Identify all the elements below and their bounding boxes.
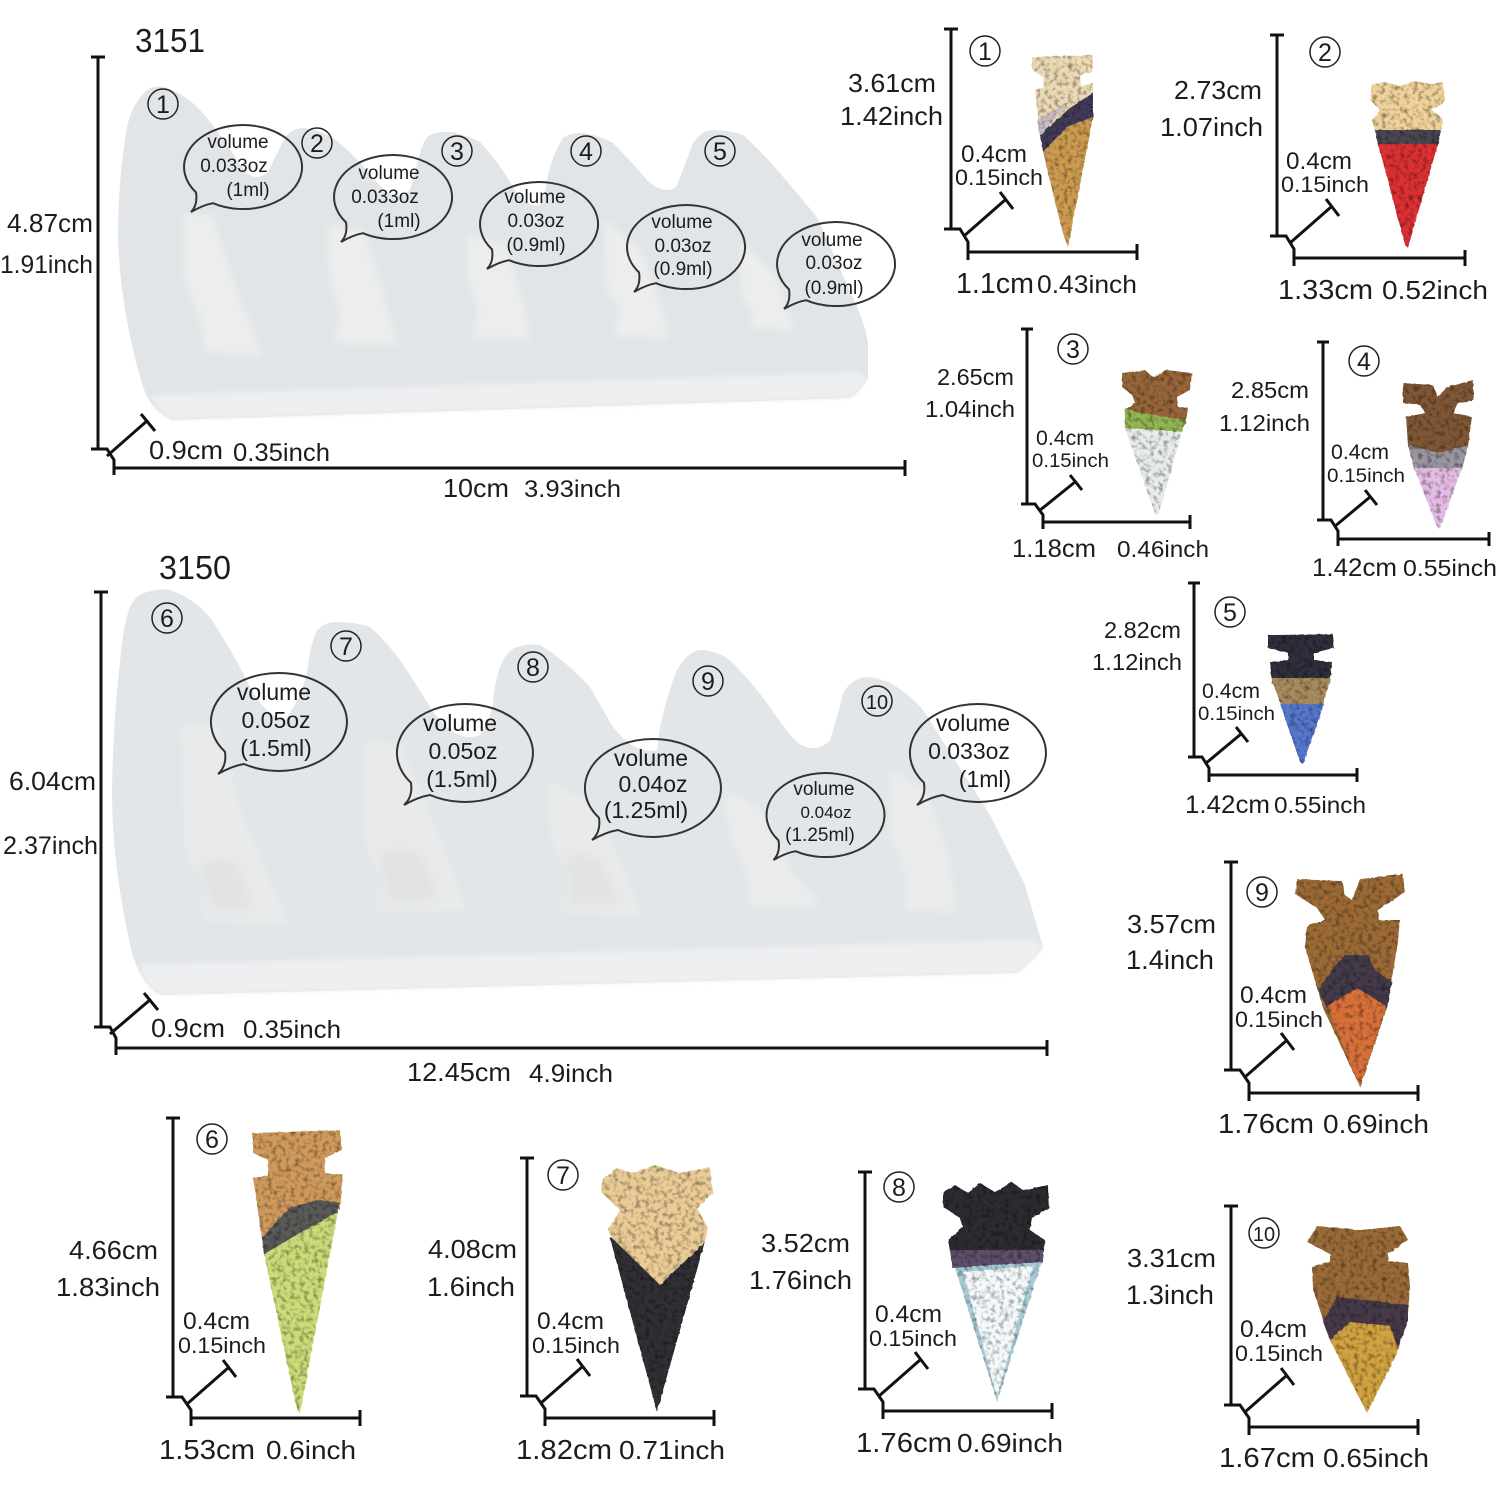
dimension labels: 0.15inch: [1235, 1007, 1323, 1032]
dimension labels: 2.65cm: [937, 364, 1014, 390]
number badges: 2: [310, 130, 324, 158]
callout: volume 7: volume: [423, 710, 497, 736]
number badges: 8: [526, 654, 540, 682]
dimension labels: 4.66cm: [69, 1235, 158, 1265]
dimension labels: 0.15inch: [1198, 704, 1275, 725]
number badge: 5: [1223, 599, 1237, 627]
callout: volume 1: 0.033oz: [200, 156, 268, 177]
dimension labels: 0.15inch: [1235, 1341, 1323, 1366]
number badge: 10: [1253, 1224, 1275, 1246]
callout: volume 5: (0.9ml): [804, 278, 864, 299]
dimension labels: 0.4cm: [961, 141, 1027, 168]
callout: volume 5: volume: [801, 230, 863, 251]
dimension lines: [1224, 1206, 1418, 1435]
callout: volume 4: volume: [651, 212, 713, 233]
dimension labels: 0.15inch: [955, 165, 1043, 190]
arrowhead 7: [602, 1165, 713, 1412]
number badges: 10: [866, 692, 888, 714]
dimension labels: 0.4cm: [183, 1308, 250, 1335]
callout: volume 3: (0.9ml): [506, 235, 566, 256]
dimension labels: 2.85cm: [1231, 377, 1309, 403]
number badge: 7: [556, 1162, 570, 1190]
dimension labels: [1126, 909, 1429, 1139]
dimension labels: 0.35inch: [243, 1016, 341, 1044]
dimension labels: 1.42cm: [1312, 554, 1397, 582]
panel: arrowhead 3: [925, 329, 1209, 563]
dimension labels: 1.33cm: [1278, 274, 1373, 305]
dimension labels: 1.76cm: [856, 1427, 952, 1458]
callout: volume 9: [767, 773, 885, 860]
dimension labels: 1.42cm: [1185, 791, 1270, 819]
callout: volume 2: volume: [358, 163, 420, 184]
number badges: 3: [450, 138, 464, 166]
dimension labels: 0.35inch: [233, 439, 330, 467]
number badges: [152, 603, 892, 716]
callout: volume 4: 0.03oz: [654, 236, 712, 257]
callout: volume 6: (1.5ml): [240, 735, 312, 761]
number badge: [548, 1160, 578, 1190]
dimension labels: 0.6inch: [266, 1435, 356, 1465]
dimension labels: 0.46inch: [1117, 536, 1209, 562]
dimension labels: 1.83inch: [56, 1272, 160, 1302]
dimension labels: 2.82cm: [1104, 617, 1181, 643]
dimension labels: 0.55inch: [1403, 555, 1497, 581]
dimension labels: 0.69inch: [1323, 1109, 1429, 1139]
dimension labels: 2.37inch: [3, 832, 98, 860]
dimension labels: 1.76inch: [749, 1265, 852, 1295]
dimension labels: 1.4inch: [1126, 945, 1214, 975]
dimension lines: [91, 57, 905, 476]
panel: arrowhead 2: [1160, 35, 1488, 305]
arrowhead 6: [252, 1130, 343, 1413]
dimension lines: [520, 1158, 714, 1426]
dimension labels: 0.9cm: [149, 435, 223, 465]
dimension labels: [0, 208, 621, 503]
dimension labels: 0.69inch: [957, 1428, 1063, 1458]
dimension labels: [1160, 75, 1488, 305]
dimension labels: 0.43inch: [1037, 271, 1137, 299]
dimension labels: 0.55inch: [1274, 792, 1366, 818]
dimension labels: 4.87cm: [7, 208, 93, 238]
callout: volume 1: [184, 125, 302, 212]
panel: arrowhead 9: [1126, 862, 1429, 1139]
dimension labels: 0.15inch: [1281, 172, 1369, 197]
number badge: 2: [1318, 39, 1332, 67]
number badges: 7: [339, 633, 353, 661]
callout: volume 4: (0.9ml): [653, 259, 713, 280]
dimension labels: 1.12inch: [1219, 410, 1310, 436]
number badges: 9: [701, 668, 715, 696]
dimension labels: 0.9cm: [151, 1013, 225, 1043]
panel: mold 3150: [3, 549, 1047, 1088]
callout: volume 3: volume: [504, 187, 566, 208]
dimension labels: 0.4cm: [1240, 982, 1307, 1009]
callout: volume 2: [334, 155, 452, 242]
number badge: 3: [1066, 336, 1080, 364]
heading: 3150: 3150: [159, 549, 231, 586]
dimension labels: 1.07inch: [1160, 112, 1263, 142]
dimension lines: [1270, 35, 1465, 266]
callout: volume 8: [585, 739, 721, 840]
dimension lines: [1317, 342, 1489, 546]
dimension labels: 1.04inch: [925, 396, 1015, 422]
dimension labels: 1.3inch: [1126, 1280, 1214, 1310]
callout: volume 7: 0.05oz: [428, 738, 498, 764]
dimension labels: [427, 1234, 725, 1465]
mold cavities: [183, 723, 955, 923]
dimension labels: 4.08cm: [428, 1234, 517, 1264]
panel: arrowhead 7: [427, 1158, 725, 1465]
callout: volume 6: volume: [237, 679, 311, 705]
dimension labels: 3.93inch: [524, 476, 621, 503]
callout: volume 10: (1ml): [959, 766, 1011, 792]
callout: volume 7: (1.5ml): [426, 766, 498, 792]
panel: mold 3151: [0, 22, 905, 503]
callout: volume 6: 0.05oz: [241, 707, 311, 733]
dimension lines: [1021, 329, 1190, 529]
panel: arrowhead 1: [840, 29, 1137, 300]
dimension labels: 2.73cm: [1174, 75, 1262, 105]
arrowhead 10: [1307, 1226, 1410, 1413]
number badge: [1247, 877, 1277, 907]
dimension labels: 1.18cm: [1012, 535, 1096, 563]
panel: arrowhead 8: [749, 1172, 1063, 1458]
dimension labels: 1.12inch: [1092, 649, 1182, 675]
dimension labels: 1.91inch: [0, 251, 93, 279]
number badge: [1310, 37, 1340, 67]
dimension lines: [944, 29, 1137, 260]
dimension labels: 0.4cm: [537, 1308, 604, 1335]
callout: volume 10: [910, 704, 1046, 805]
number badge: 6: [205, 1126, 219, 1154]
callout: volume 6: [211, 673, 347, 774]
arrowhead 8: [943, 1182, 1049, 1402]
number badge: [884, 1172, 914, 1202]
dimension labels: 3.31cm: [1127, 1243, 1216, 1273]
callout: volume 8: 0.04oz: [618, 771, 688, 797]
number badge: [197, 1124, 227, 1154]
dimension lines: [94, 592, 1047, 1056]
panel: arrowhead 6: [56, 1118, 360, 1465]
arrowhead 5: [1268, 634, 1334, 764]
dimension labels: 3.57cm: [1127, 909, 1216, 939]
dimension labels: 1.67cm: [1219, 1442, 1315, 1473]
arrowhead 1: [1032, 55, 1093, 247]
dimension labels: 0.15inch: [1327, 466, 1405, 487]
dimension labels: [56, 1235, 356, 1465]
dimension lines: [858, 1172, 1052, 1419]
callout: volume 5: 0.03oz: [805, 253, 863, 274]
callout: volume 7: [397, 704, 533, 805]
dimension labels: 0.4cm: [1202, 680, 1260, 703]
callout: volume 9: (1.25ml): [785, 825, 855, 846]
dimension labels: 0.4cm: [1036, 427, 1094, 450]
heading: 3151: 3151: [135, 22, 205, 59]
callout: volume 1: (1ml): [226, 180, 270, 201]
dimension labels: 6.04cm: [9, 766, 96, 796]
number badge: 9: [1255, 879, 1269, 907]
dimension labels: 0.4cm: [1286, 148, 1352, 175]
dimension labels: 1.6inch: [427, 1272, 515, 1302]
callout: volume 9: 0.04oz: [800, 803, 852, 822]
number badges: 5: [713, 138, 727, 166]
arrowhead 3: [1122, 370, 1192, 516]
panel: arrowhead 5: [1092, 583, 1366, 819]
dimension labels: 1.76cm: [1218, 1108, 1314, 1139]
cavity shading: [200, 850, 620, 912]
number badges: [148, 89, 735, 166]
arrowhead 4: [1403, 380, 1474, 529]
panel: arrowhead 10: [1126, 1206, 1429, 1473]
number badge: [1215, 597, 1245, 627]
number badge: [1058, 334, 1088, 364]
dimension labels: 3.61cm: [848, 68, 936, 98]
dimension lines: [1188, 583, 1357, 782]
dimension labels: [1219, 377, 1497, 582]
callout: volume 1: volume: [207, 132, 269, 153]
number badge: 1: [978, 38, 992, 66]
dimension labels: [840, 68, 1137, 300]
callout: volume 2: (1ml): [377, 211, 421, 232]
panel: arrowhead 4: [1219, 342, 1497, 582]
dimension labels: 0.4cm: [1331, 441, 1389, 464]
dimension labels: 0.4cm: [1240, 1316, 1307, 1343]
dimension labels: 1.53cm: [159, 1434, 255, 1465]
silicone mold 3151: [118, 86, 868, 420]
callout: volume 8: volume: [614, 745, 688, 771]
dimension labels: [3, 766, 613, 1088]
dimension labels: 0.65inch: [1323, 1443, 1429, 1473]
arrowhead 9: [1295, 874, 1405, 1087]
dimension lines: [166, 1118, 360, 1426]
number badges: 4: [579, 138, 593, 166]
mold cavities: [183, 215, 795, 355]
number badge: [1249, 1218, 1279, 1248]
dimension labels: 3.52cm: [761, 1228, 850, 1258]
number badge: [970, 36, 1000, 66]
arrowhead 2: [1370, 81, 1445, 248]
callout: volume 10: volume: [936, 710, 1010, 736]
dimension labels: 0.71inch: [619, 1435, 725, 1465]
dimension labels: [749, 1228, 1063, 1458]
dimension labels: 0.52inch: [1382, 275, 1488, 305]
dimension labels: 1.1cm: [956, 268, 1034, 300]
number badges: 1: [156, 91, 170, 119]
callout: volume 3: 0.03oz: [507, 211, 565, 232]
dimension labels: 12.45cm: [407, 1057, 511, 1087]
number badges: 6: [160, 605, 174, 633]
number badge: [1349, 346, 1379, 376]
dimension labels: 0.15inch: [869, 1326, 957, 1351]
dimension labels: [925, 364, 1209, 563]
dimension labels: 1.42inch: [840, 101, 943, 131]
dimension labels: 0.15inch: [178, 1333, 266, 1358]
dimension labels: 0.15inch: [1032, 451, 1109, 472]
number badge: 8: [892, 1174, 906, 1202]
number badge: 4: [1357, 348, 1371, 376]
dimension labels: [1092, 617, 1366, 819]
callout: volume 9: volume: [793, 779, 855, 800]
callout: volume 3: [480, 182, 598, 269]
callout: volume 8: (1.25ml): [604, 797, 688, 823]
callout: volume 5: [777, 222, 895, 309]
callout: volume 2: 0.033oz: [351, 187, 419, 208]
dimension labels: [1126, 1243, 1429, 1473]
silicone mold 3150: [112, 589, 1043, 995]
dimension lines: [1224, 862, 1418, 1101]
dimension labels: 10cm: [443, 473, 509, 503]
callout: volume 4: [627, 205, 745, 292]
dimension labels: 0.15inch: [532, 1333, 620, 1358]
dimension labels: 1.82cm: [516, 1434, 612, 1465]
callout: volume 10: 0.033oz: [928, 738, 1010, 764]
dimension labels: 4.9inch: [529, 1060, 613, 1088]
dimension labels: 0.4cm: [875, 1301, 942, 1328]
